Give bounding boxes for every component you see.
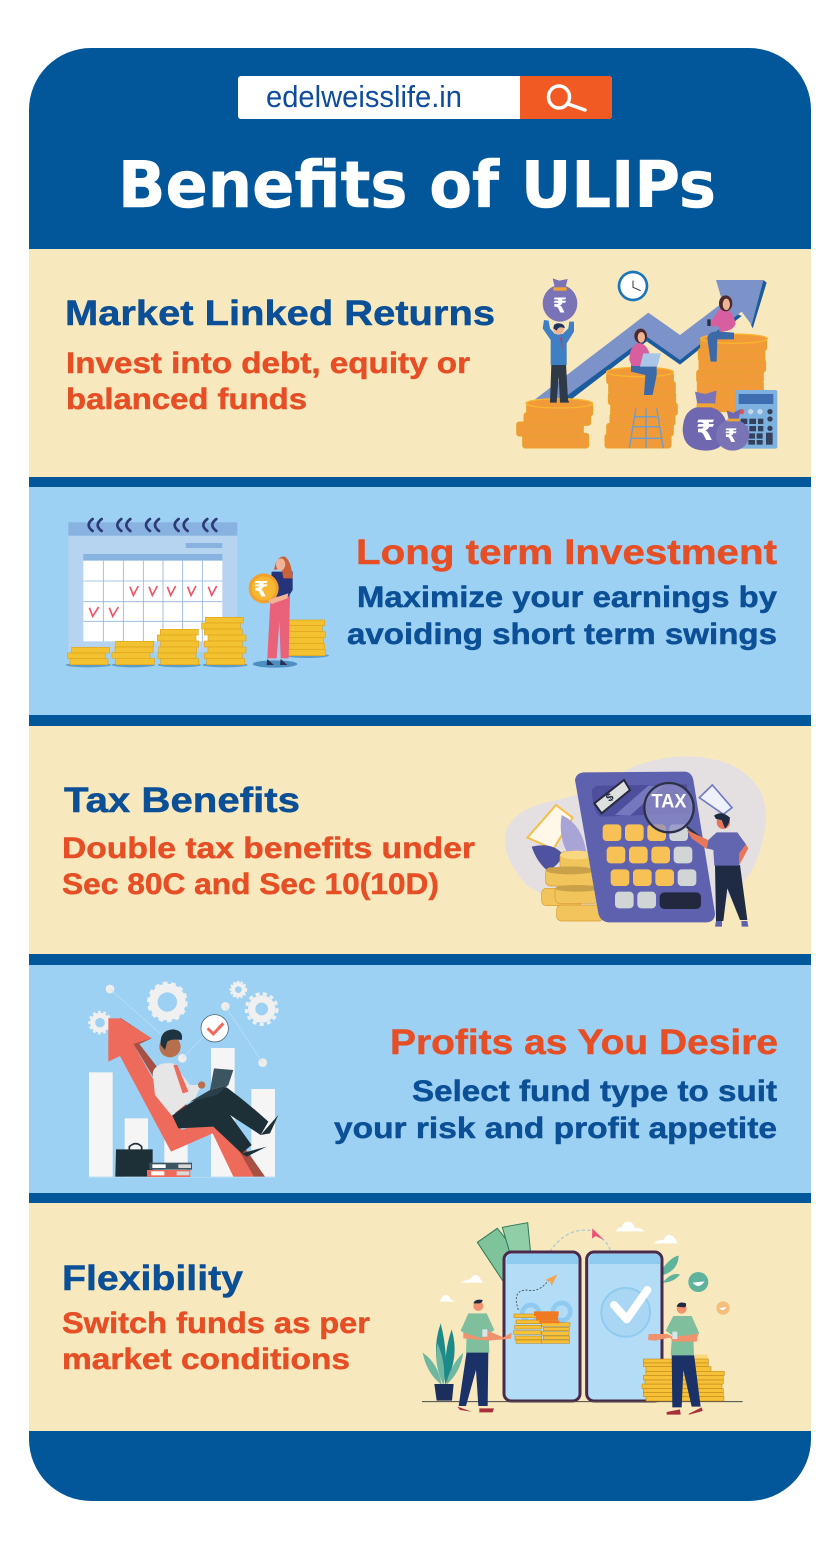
clock bbox=[618, 271, 648, 301]
money bags: ₹ bbox=[725, 426, 738, 447]
blob bbox=[505, 756, 766, 922]
text block: Switch funds as per bbox=[62, 1307, 370, 1340]
note and leaves bbox=[527, 805, 587, 870]
text block: avoiding short term swings bbox=[347, 618, 777, 651]
woman with coin bbox=[249, 556, 297, 668]
man holding bag: ₹ bbox=[553, 293, 567, 317]
illustration: phones and people bbox=[422, 1222, 743, 1415]
woman with coin: ₹ bbox=[254, 578, 268, 603]
text block bbox=[66, 347, 470, 416]
man holding bag bbox=[543, 278, 577, 403]
calendar bbox=[68, 519, 237, 652]
panel: long term investment bbox=[29, 487, 811, 715]
arrow bbox=[108, 1018, 265, 1177]
text block: Select fund type to suit bbox=[412, 1075, 777, 1108]
bars bbox=[89, 1048, 275, 1177]
clouds bbox=[440, 1222, 678, 1302]
person right bbox=[648, 1303, 703, 1415]
text block bbox=[347, 581, 777, 651]
coins right bbox=[642, 1355, 724, 1401]
banknotes bbox=[477, 1223, 531, 1282]
text block: Double tax benefits under bbox=[62, 832, 475, 865]
phone right bbox=[587, 1252, 662, 1401]
magnifier: TAX bbox=[651, 792, 687, 813]
search bar: edelweisslife.in bbox=[266, 79, 462, 114]
text block bbox=[62, 832, 475, 901]
panel: profits as you desire bbox=[29, 965, 811, 1193]
man bbox=[153, 1029, 278, 1157]
heading: Tax Benefits bbox=[64, 781, 300, 820]
illustration: man on growth arrow bbox=[88, 982, 278, 1177]
panel: tax benefits bbox=[29, 726, 811, 954]
title: Benefits of ULIPs bbox=[118, 149, 716, 223]
text block: Invest into debt, equity or bbox=[66, 347, 470, 380]
illustration: coins and growth arrow bbox=[517, 271, 777, 451]
text block: balanced funds bbox=[66, 383, 307, 416]
briefcase bbox=[115, 1144, 153, 1177]
check bubble bbox=[201, 1015, 228, 1042]
coin stacks bbox=[66, 617, 329, 667]
heading: Flexibility bbox=[62, 1259, 244, 1298]
network dots bbox=[106, 985, 267, 1067]
heading: Long term Investment bbox=[356, 533, 777, 572]
calculator bbox=[735, 390, 777, 449]
person left bbox=[457, 1300, 512, 1412]
text block: your risk and profit appetite bbox=[334, 1112, 777, 1145]
heading: Profits as You Desire bbox=[390, 1023, 778, 1062]
emojis bbox=[688, 1272, 730, 1315]
search bar bbox=[238, 76, 612, 119]
coins bbox=[542, 852, 603, 921]
woman with laptop bbox=[629, 329, 661, 395]
icon: magnifier bbox=[548, 86, 585, 110]
text block bbox=[334, 1075, 777, 1145]
illustration: calendar and coins bbox=[66, 519, 329, 668]
money bags: ₹ bbox=[696, 414, 715, 447]
coin stack left bbox=[517, 403, 593, 448]
folders bbox=[147, 1163, 192, 1177]
text block bbox=[62, 1307, 370, 1376]
calculator: $ bbox=[604, 791, 617, 805]
gears bbox=[89, 982, 277, 1033]
leaves bbox=[663, 1256, 680, 1283]
text block: market conditions bbox=[62, 1343, 350, 1376]
illustration: calculator tax bbox=[505, 756, 766, 927]
text block: Sec 80C and Sec 10(10D) bbox=[62, 868, 439, 901]
woman with phone bbox=[707, 295, 736, 362]
rupee note bbox=[699, 785, 732, 814]
text block: Maximize your earnings by bbox=[357, 581, 777, 614]
panel: market linked returns bbox=[29, 249, 811, 477]
calculator bbox=[575, 772, 715, 922]
magnifier bbox=[644, 783, 703, 840]
panel: flexibility bbox=[29, 1203, 811, 1431]
ground bbox=[422, 1400, 743, 1403]
phone left bbox=[504, 1252, 580, 1401]
money bags bbox=[683, 391, 749, 451]
heading: Market Linked Returns bbox=[65, 294, 495, 333]
ladder bbox=[629, 408, 663, 448]
plant bbox=[423, 1323, 463, 1401]
person bbox=[687, 813, 748, 927]
